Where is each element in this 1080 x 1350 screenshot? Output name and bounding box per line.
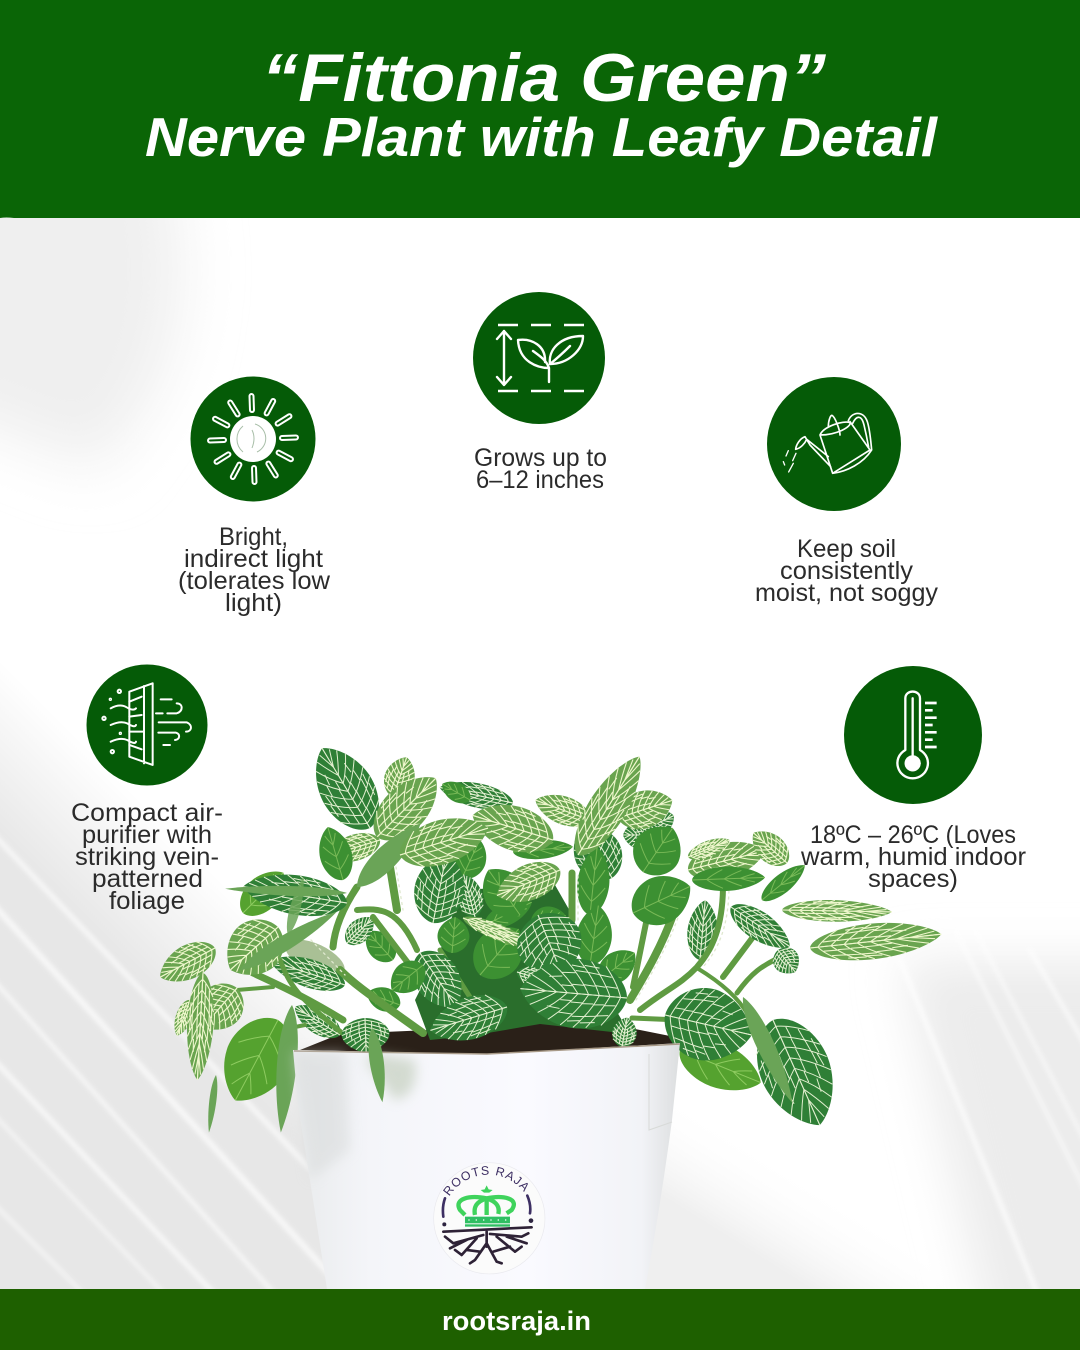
label: temperature <box>800 821 1026 893</box>
icon: height with sprout <box>473 292 605 424</box>
back foliage <box>266 804 769 1103</box>
front leaves <box>152 734 943 1139</box>
title <box>145 40 939 168</box>
label: air purifier: patterned <box>92 865 203 893</box>
title: “Fittonia Green” <box>262 40 826 116</box>
label: light <box>178 523 331 617</box>
label: temperature: 18ºC – 26ºC (Loves <box>810 821 1016 849</box>
label: air purifier <box>71 799 223 915</box>
label: height: Grows up to <box>474 444 607 472</box>
icon: thermometer <box>844 666 982 804</box>
sticker: Roots Raja logo <box>434 1162 546 1274</box>
stem hairs <box>311 867 729 1000</box>
label: height <box>474 444 607 494</box>
label: light: light) <box>225 589 282 617</box>
label: height: 6–12 inches <box>476 466 604 494</box>
soil <box>300 1022 680 1054</box>
label: watering: moist, not soggy <box>755 579 939 607</box>
label: light: Bright, <box>219 523 288 551</box>
icon: sun <box>190 376 316 502</box>
icon: watering can <box>767 377 901 511</box>
label: air purifier: Compact air- <box>71 799 223 827</box>
plant in pot <box>160 748 942 1289</box>
label: watering <box>755 535 939 607</box>
footer website: rootsraja.in <box>442 1306 591 1336</box>
label: air purifier: striking vein- <box>75 843 219 871</box>
header banner <box>0 0 1080 218</box>
label: temperature: warm, humid indoor <box>800 843 1026 871</box>
label: temperature: spaces) <box>868 865 958 893</box>
leaf drooping over pot <box>365 1027 389 1103</box>
label: light: indirect light <box>184 545 323 573</box>
pot <box>293 1043 680 1289</box>
label: watering: consistently <box>780 557 913 585</box>
label: watering: Keep soil <box>797 535 896 563</box>
label: air purifier: purifier with <box>82 821 212 849</box>
icon: air purifier <box>86 664 208 786</box>
stems <box>237 867 790 1037</box>
footer band <box>0 1289 1080 1350</box>
label: air purifier: foliage <box>109 887 185 915</box>
title: Nerve Plant with Leafy Detail <box>145 106 939 168</box>
sticker: Roots Raja logo: ROOTS RAJA <box>443 1166 528 1196</box>
label: light: (tolerates low <box>178 567 331 595</box>
